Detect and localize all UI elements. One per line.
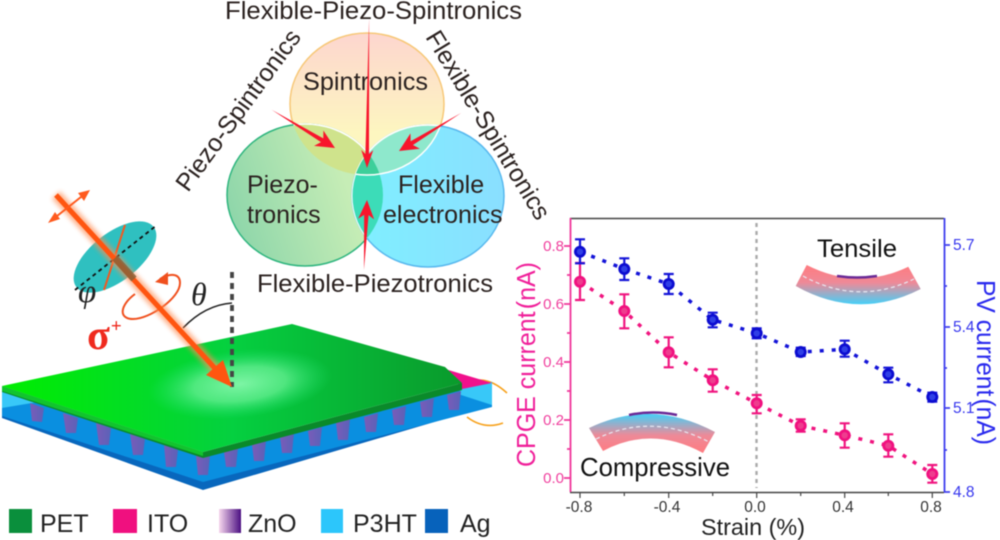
- light p3ht at left: [2, 390, 38, 408]
- arrow: top: [361, 18, 375, 168]
- legend: P3HT: [321, 509, 417, 538]
- pv error bars: [575, 239, 937, 402]
- inset: compressive: [580, 412, 730, 482]
- legend: Ag: Ag: [460, 510, 491, 538]
- beam glow: [56, 195, 222, 376]
- overlap: spintronics and flexible: [354, 124, 440, 174]
- cpge error bars: [575, 263, 937, 483]
- left tick labels: 0.6: [543, 296, 564, 313]
- cpge markers: [575, 277, 937, 479]
- right tick labels: 5.1: [953, 400, 975, 417]
- chart: [511, 218, 1000, 540]
- arrow: bottom: [356, 200, 375, 270]
- arrow: left: [267, 102, 340, 156]
- angle arc: [183, 303, 232, 328]
- sigma plus: +: [111, 316, 122, 337]
- overlap: centre: [355, 158, 380, 174]
- device: [2, 324, 492, 490]
- label: Flexible-Piezotronics: Flexible-Piezotronics: [257, 270, 493, 298]
- left axis: [564, 218, 570, 492]
- x ticks: [580, 492, 932, 498]
- overlap: piezotronics and flexible: [350, 174, 384, 239]
- right tick labels: 5.7: [953, 237, 975, 254]
- venn diagram: [227, 33, 504, 267]
- circle: piezotronics: [227, 124, 383, 266]
- left tick labels: 0.4: [543, 354, 564, 371]
- pet bright left edge: [2, 386, 203, 456]
- right tick labels: 4.8: [953, 484, 975, 501]
- circle: spintronics: [290, 33, 444, 175]
- legend: Ag: [425, 509, 491, 538]
- slow axis: [104, 225, 125, 290]
- left tick labels: 0.2: [543, 412, 564, 429]
- tensile label: Tensile: [817, 235, 897, 263]
- compressive label: Compressive: [580, 452, 730, 482]
- inset: tensile: [796, 235, 921, 304]
- label: Spintronics: Spintronics: [303, 68, 428, 96]
- beam head: [206, 360, 232, 387]
- legend: [9, 509, 491, 538]
- plot top and bottom axes: [570, 218, 944, 492]
- left tick labels: 0.8: [543, 238, 564, 255]
- phi: φ: [78, 274, 96, 310]
- x tick labels: 0.4: [832, 499, 854, 516]
- legend: PET: PET: [40, 510, 89, 538]
- zero strain reference line: [755, 223, 758, 488]
- series: PV current: [575, 239, 937, 402]
- label: Flexible electronics: Flexible: [398, 171, 484, 199]
- x tick labels: -0.8: [566, 499, 592, 516]
- x tick labels: -0.4: [654, 499, 681, 516]
- left tick labels: [543, 238, 564, 487]
- label: Flexible electronics: electronics: [383, 201, 502, 229]
- legend: ITO: [113, 509, 188, 538]
- overlap: spintronics and piezotronics: [292, 122, 366, 174]
- zno nanorods: [30, 391, 461, 475]
- label: Flexible-Spintronics: Flexible-Spintronics: [420, 26, 556, 225]
- legend: ITO: ITO: [147, 510, 188, 538]
- x tick labels: [566, 499, 942, 516]
- arc: spintronics lower edge: [355, 126, 442, 176]
- arrow: right: [394, 105, 466, 159]
- red arrows: [267, 18, 466, 270]
- beam inside waveplate: [115, 258, 134, 279]
- ag layer: [2, 395, 492, 490]
- left axis title: CPGE current (nA): [511, 262, 541, 467]
- beam core: [56, 195, 222, 376]
- tensile zno strip: [837, 276, 877, 278]
- normal dashed line: [230, 272, 234, 387]
- compressive zno strip: [629, 412, 677, 415]
- polarization arrows: [48, 190, 90, 223]
- ito: [445, 369, 492, 389]
- p3ht layer: [2, 382, 492, 482]
- theta: θ: [191, 276, 207, 312]
- compressive neutral line: [596, 426, 709, 442]
- pet glow: [154, 352, 324, 416]
- label: Piezotronics: tronics: [247, 201, 321, 229]
- x tick labels: 0.8: [920, 499, 942, 516]
- sigma plus: σ: [87, 313, 110, 359]
- x tick labels: 0.0: [744, 499, 766, 516]
- light p3ht at right: [458, 382, 492, 405]
- left tick labels: 0.0: [543, 470, 564, 487]
- rotation arrow: [123, 272, 180, 319]
- legend: PET: [9, 509, 89, 538]
- series: CPGE current: [575, 263, 937, 483]
- waveplate ellipse: [62, 208, 168, 306]
- polarizer: [62, 208, 168, 310]
- venn labels: [170, 0, 556, 298]
- pet side: [2, 383, 462, 458]
- legend: ZnO: ZnO: [248, 510, 297, 538]
- compressive band: [589, 414, 715, 453]
- cpge dotted line: [580, 282, 932, 474]
- fast axis: [75, 225, 157, 290]
- legend: P3HT: P3HT: [353, 510, 417, 538]
- tensile band: [796, 265, 921, 304]
- tensile neutral line: [803, 276, 914, 292]
- label: Piezotronics: Piezo-: [247, 171, 318, 199]
- label: Piezo-Spintronics: Piezo-Spintronics: [170, 24, 307, 197]
- right axis: [944, 218, 950, 492]
- circle: flexible electronics: [352, 125, 504, 267]
- pet top: [2, 324, 462, 452]
- pv markers: [575, 247, 937, 402]
- pv dotted line: [580, 252, 932, 397]
- legend: ZnO: [219, 509, 297, 538]
- light beam: [48, 190, 232, 387]
- right tick labels: [953, 237, 975, 501]
- x axis title: Strain (%): [701, 514, 805, 540]
- right tick labels: 5.4: [953, 319, 975, 336]
- orange wire arcs: [465, 380, 507, 425]
